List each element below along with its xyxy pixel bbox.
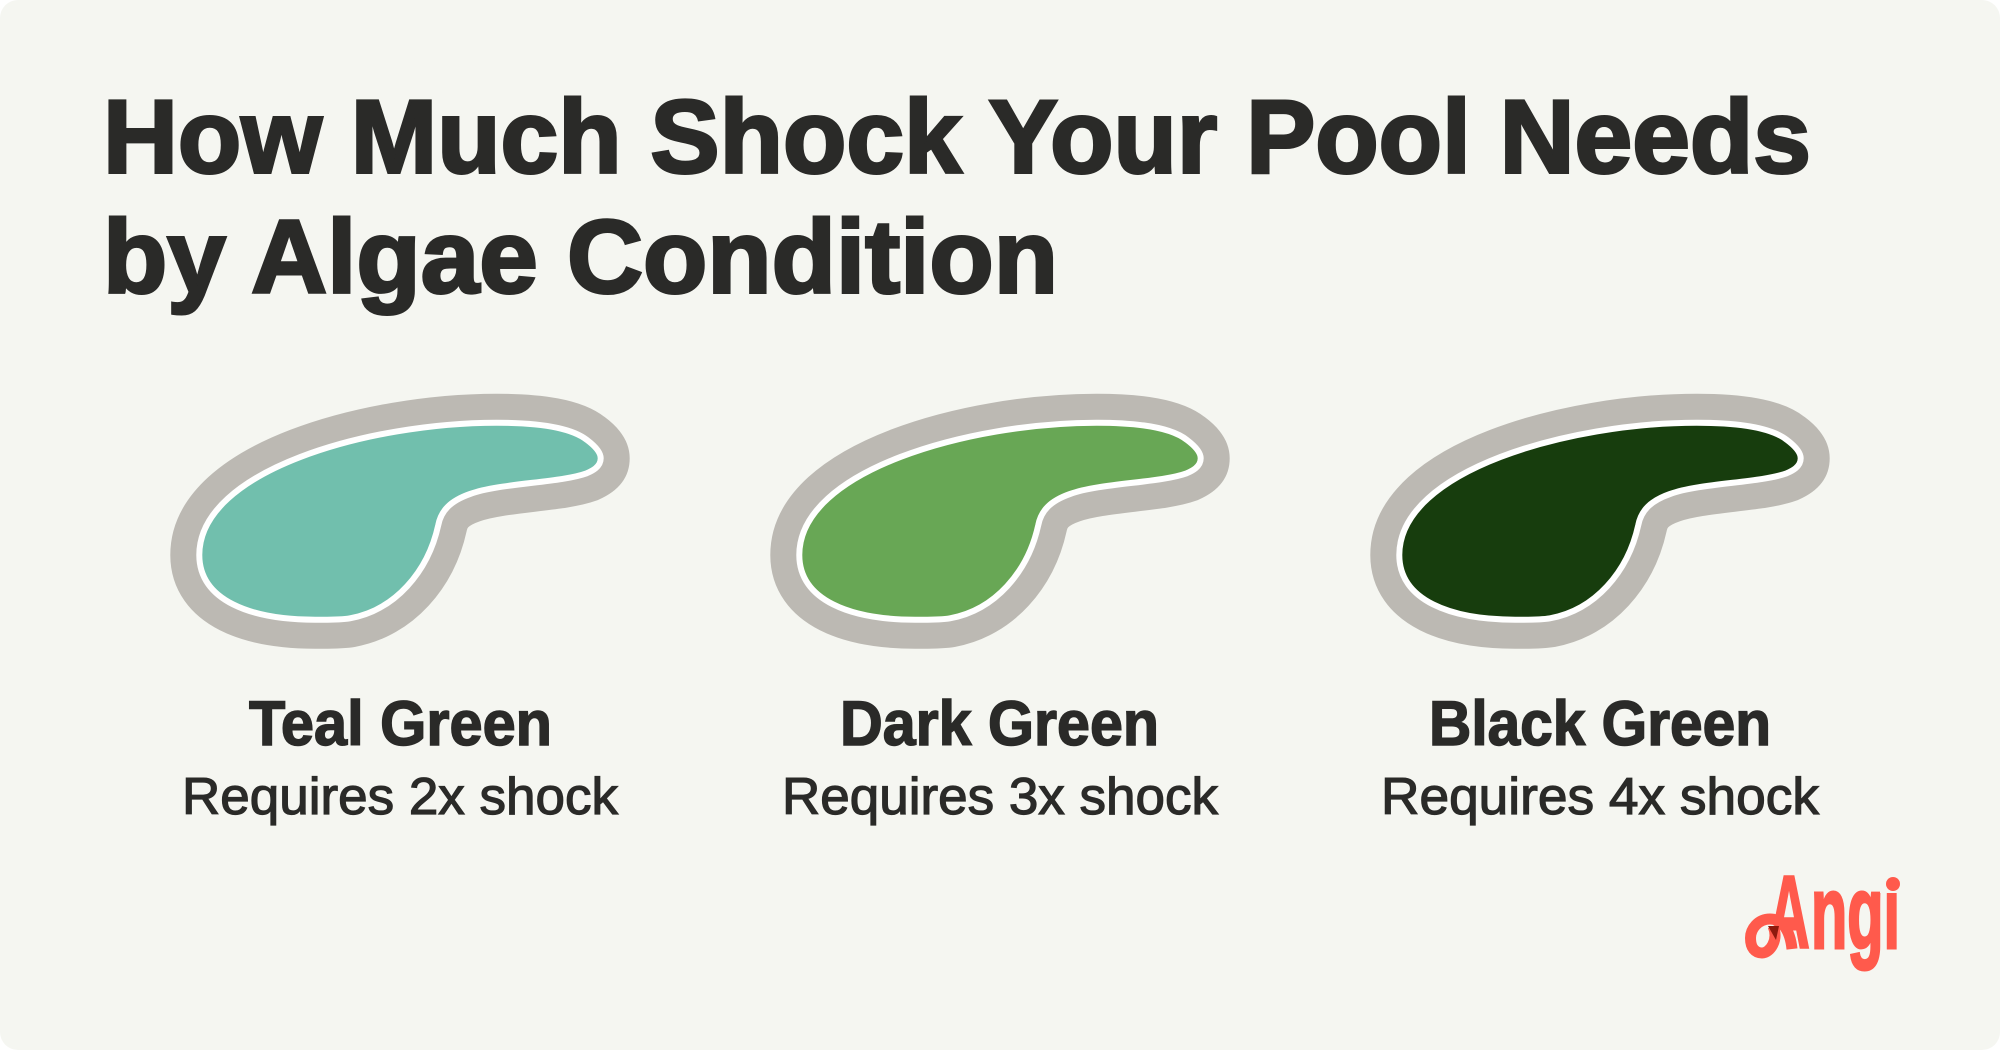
title: by Algae Condition — [103, 200, 1058, 316]
panel: black green pool — [1381, 423, 1820, 826]
icon: teal pool — [199, 423, 601, 620]
icon: dark green pool — [799, 423, 1201, 620]
logo: Angi — [1750, 855, 1904, 971]
panel: dark green pool — [782, 423, 1219, 826]
label: black green: Black Green — [1429, 689, 1771, 759]
title — [103, 80, 1811, 316]
label: dark green: Dark Green — [840, 689, 1159, 759]
panel: teal green pool — [182, 423, 619, 826]
text: requires 4x: Requires 4x shock — [1381, 768, 1820, 826]
label: teal green: Teal Green — [249, 689, 552, 759]
title: How Much Shock Your Pool Needs — [103, 80, 1811, 196]
text: requires 2x: Requires 2x shock — [182, 768, 619, 826]
logo: Angi: ngi — [1811, 855, 1900, 971]
logo: Angi: A — [1768, 855, 1810, 971]
icon: black green pool — [1399, 423, 1801, 620]
text: requires 3x: Requires 3x shock — [782, 768, 1219, 826]
